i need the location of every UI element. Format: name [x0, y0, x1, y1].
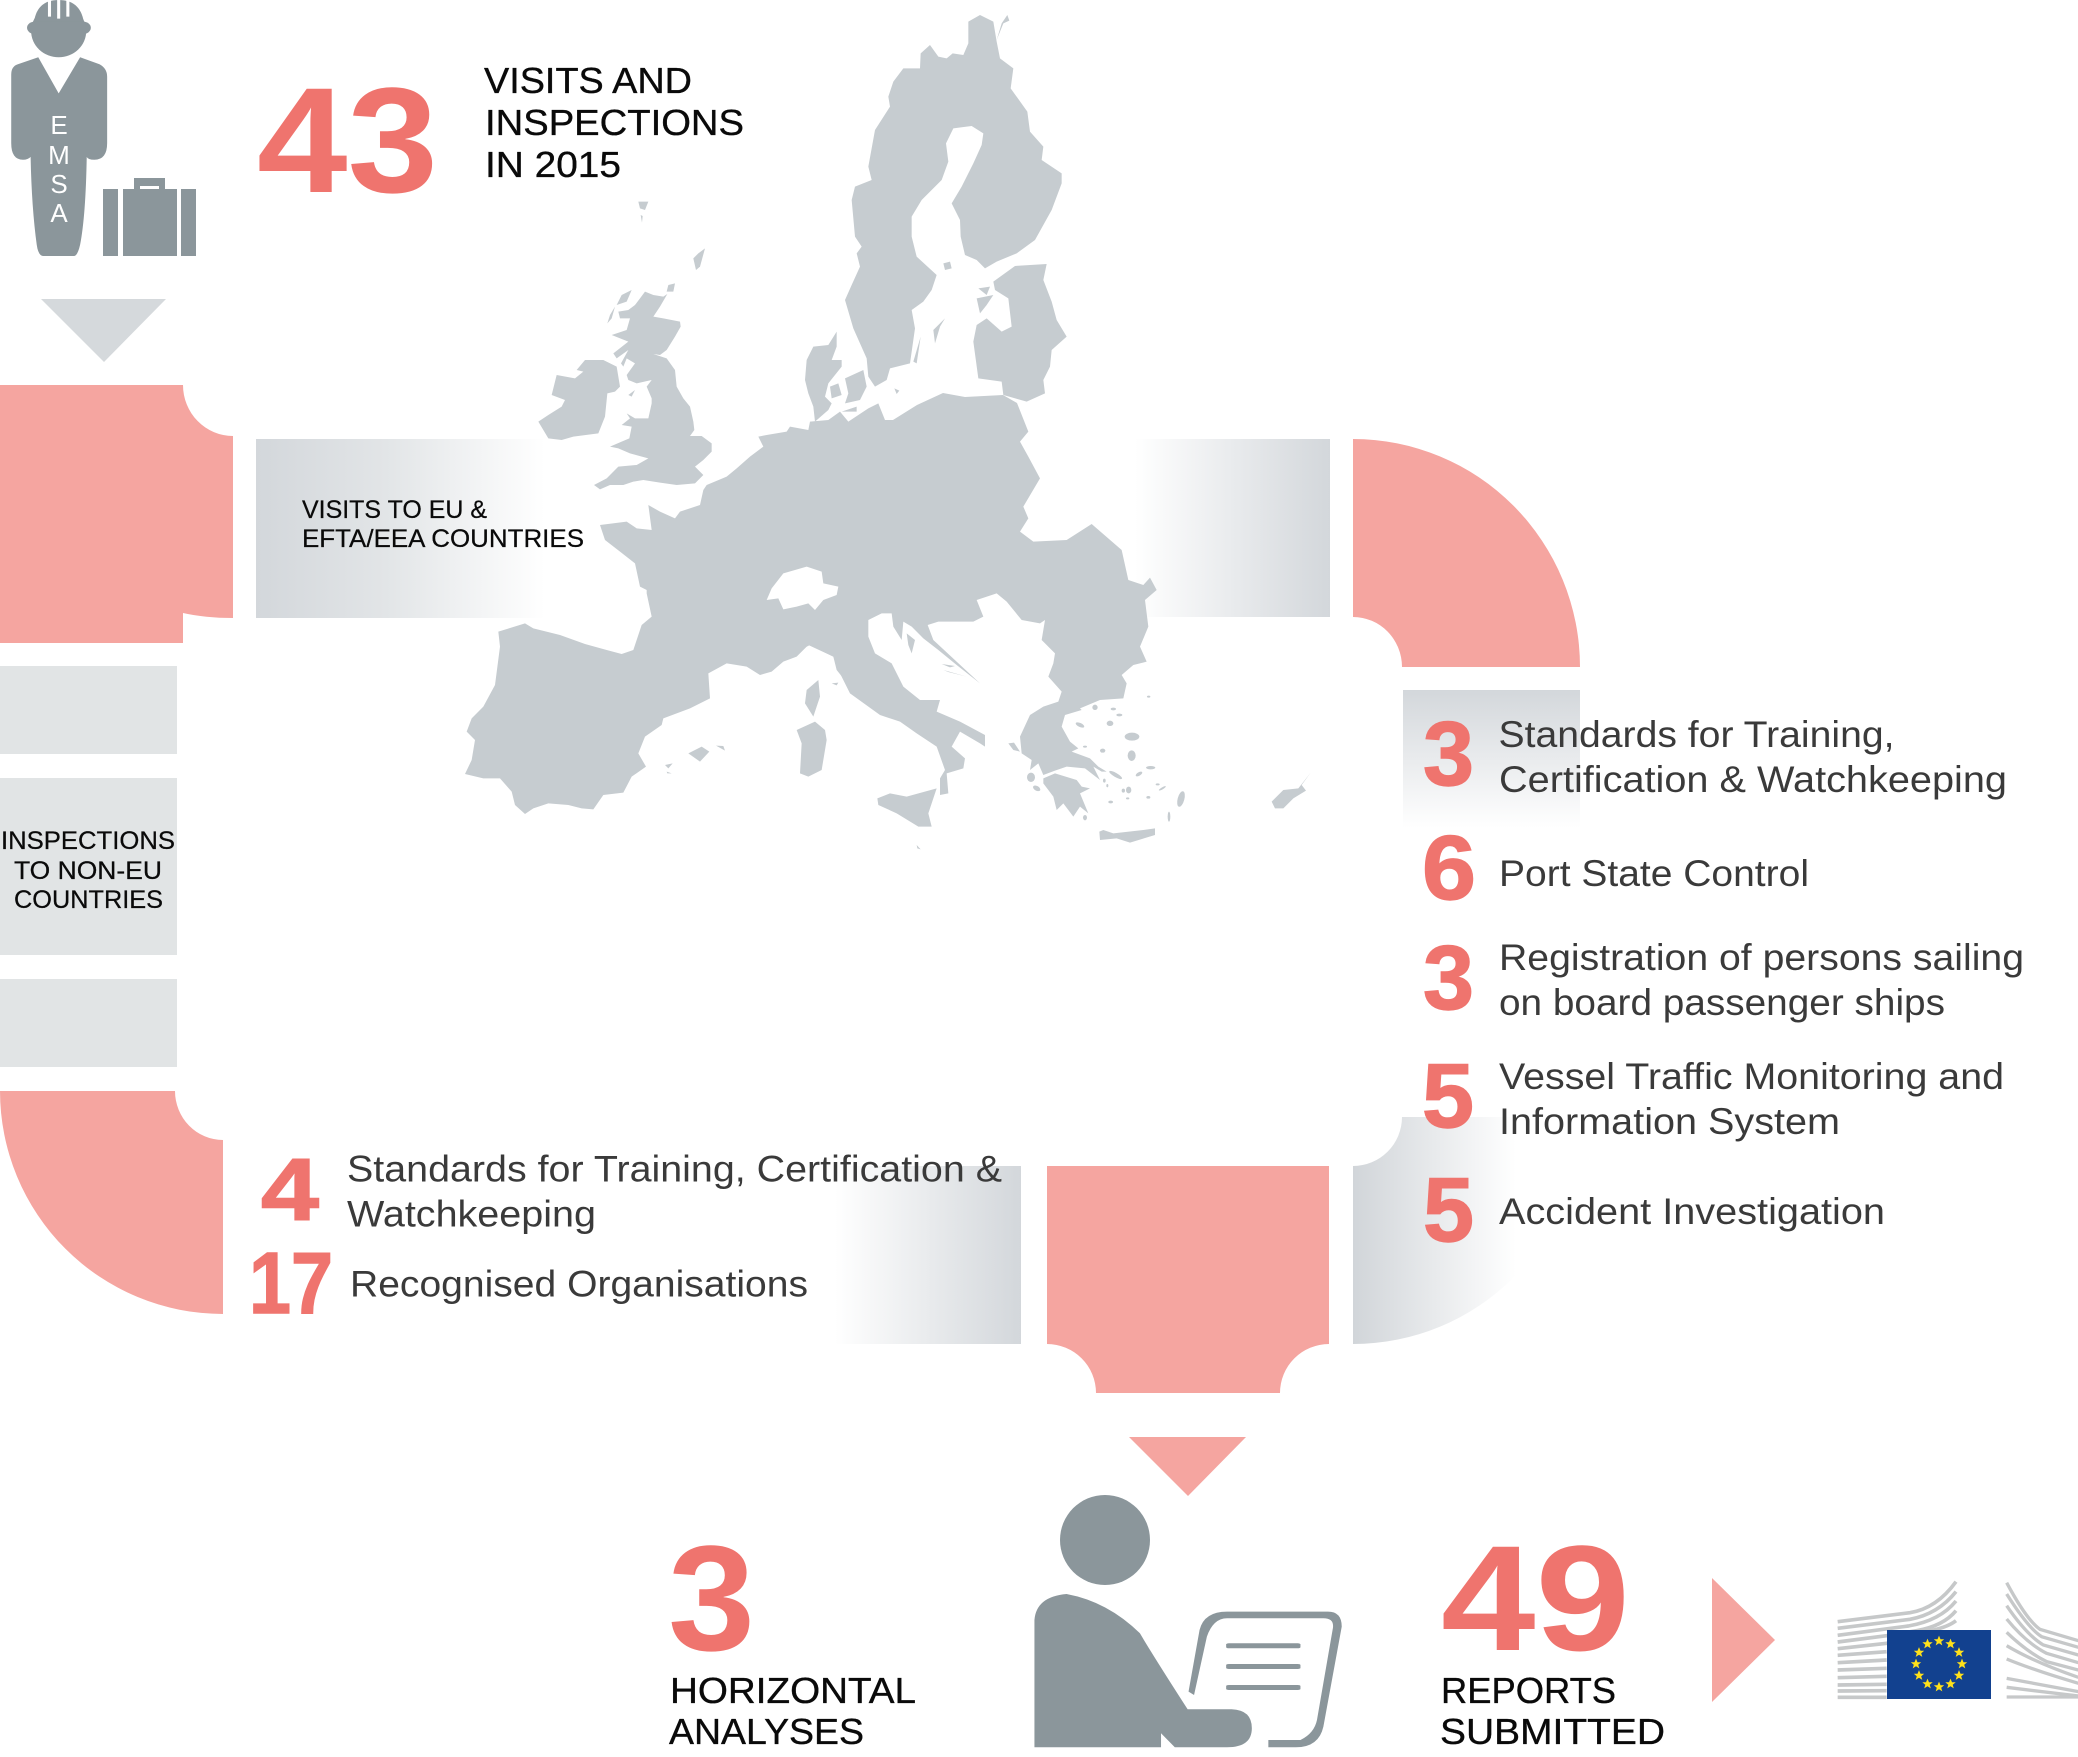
panel: bottom centre pink block	[1047, 1166, 1329, 1393]
item: recognised organisations	[249, 1235, 808, 1332]
icon: building right wing	[2007, 1583, 2078, 1697]
panel: visits flow band left	[256, 439, 545, 618]
map hole: Switzerland	[767, 567, 838, 610]
item: registration of persons: on board passenger ships	[1499, 982, 1945, 1023]
item: registration of persons	[1423, 928, 2024, 1029]
arrow: pink right triangle	[1712, 1578, 1775, 1702]
icon: EMSA inspector with briefcase	[11, 0, 196, 256]
item: recognised organisations: 17	[249, 1235, 333, 1332]
stat: 3 horizontal analyses: ANALYSES	[669, 1711, 864, 1752]
panel: top right pink corner	[1353, 439, 1580, 667]
label: inspections to non-EU countries: TO NON-EU	[14, 857, 162, 885]
item: vessel traffic monitoring: Information System	[1499, 1101, 1840, 1142]
panel: lower right gray corner	[1353, 1117, 1580, 1344]
panel: lower left pink corner	[0, 1091, 223, 1314]
item: standards for training	[261, 1140, 1002, 1239]
panel: visits flow band right	[1135, 439, 1330, 617]
icon: EU flag	[1887, 1630, 1991, 1699]
list: non-EU inspection categories	[249, 1140, 1002, 1332]
panel: bottom gray band	[835, 1166, 1021, 1344]
text: EMSA letters: S	[50, 169, 68, 199]
stat: 49 reports submitted: REPORTS	[1441, 1670, 1616, 1711]
item: vessel traffic monitoring: 5	[1422, 1046, 1474, 1147]
item: standards for training: Standards for Training, Certification &	[347, 1148, 1002, 1190]
stat: 3 horizontal analyses: 3	[668, 1514, 755, 1682]
label: visits to EU and EFTA/EEA countries: VISITS TO EU &	[302, 496, 487, 524]
text: EMSA letters: M	[48, 140, 70, 170]
item: registration of persons: 3	[1423, 928, 1474, 1029]
text: EMSA letters	[48, 110, 70, 228]
item: vessel traffic monitoring: Vessel Traffic Monitoring and	[1499, 1056, 2004, 1097]
heading: visits and inspections in 2015	[484, 60, 744, 185]
icon: European Commission building and flag	[1838, 1582, 2078, 1699]
item: standards for training: 4	[261, 1140, 319, 1239]
label: visits to EU and EFTA/EEA countries: EFTA/EEA COUNTRIES	[302, 525, 584, 553]
number: 43: 43	[257, 56, 438, 224]
item: port state control: Port State Control	[1499, 853, 1809, 894]
label: inspections to non-EU countries	[1, 827, 175, 914]
text: EMSA letters: A	[50, 198, 68, 228]
item: recognised organisations: Recognised Organisations	[350, 1264, 808, 1304]
item: registration of persons: Registration of persons sailing	[1499, 937, 2024, 978]
label: inspections to non-EU countries: INSPECTIONS	[1, 827, 175, 855]
label: visits to EU and EFTA/EEA countries	[302, 496, 584, 553]
panel: right gray band	[1403, 690, 1580, 828]
map of Europe	[465, 15, 1311, 849]
item: standards for training: 3	[1423, 704, 1474, 805]
item: vessel traffic monitoring	[1422, 1046, 2004, 1147]
stat: 49 reports submitted: 49	[1441, 1514, 1630, 1682]
icon: inspector figure	[11, 0, 107, 256]
stat: 49 reports submitted: SUBMITTED	[1440, 1711, 1665, 1752]
stat: 3 horizontal analyses: HORIZONTAL	[670, 1670, 916, 1711]
stat: 3 horizontal analyses	[668, 1514, 916, 1752]
item: port state control	[1422, 818, 1809, 919]
heading: visits and inspections in 2015: IN 2015	[485, 144, 621, 185]
list: EU visit categories	[1422, 704, 2024, 1261]
arrow: pink down triangle	[1129, 1437, 1246, 1496]
heading: visits and inspections in 2015: VISITS AND	[484, 60, 692, 101]
item: accident investigation: Accident Investigation	[1499, 1191, 1885, 1232]
item: standards for training: Watchkeeping	[347, 1194, 596, 1234]
stat: 49 reports submitted	[1440, 1514, 1665, 1752]
item: standards for training: Standards for Training,	[1498, 714, 1894, 755]
icon: building left wing	[1838, 1582, 1956, 1697]
item: standards for training: Certification & Watchkeeping	[1499, 759, 2007, 800]
icon: briefcase	[103, 178, 196, 256]
panel: left gray blocks	[0, 666, 177, 1067]
heading: visits and inspections in 2015: INSPECTIONS	[485, 102, 744, 143]
item: standards for training	[1423, 704, 2007, 805]
arrow: gray down triangle	[41, 299, 166, 362]
item: accident investigation	[1423, 1160, 1885, 1261]
icon: analyst with document	[1034, 1495, 1342, 1747]
text: EMSA letters: E	[50, 110, 68, 140]
item: port state control: 6	[1422, 818, 1476, 919]
panel: top left pink block	[0, 385, 233, 643]
item: accident investigation: 5	[1423, 1160, 1474, 1261]
label: inspections to non-EU countries: COUNTRIES	[14, 886, 163, 914]
